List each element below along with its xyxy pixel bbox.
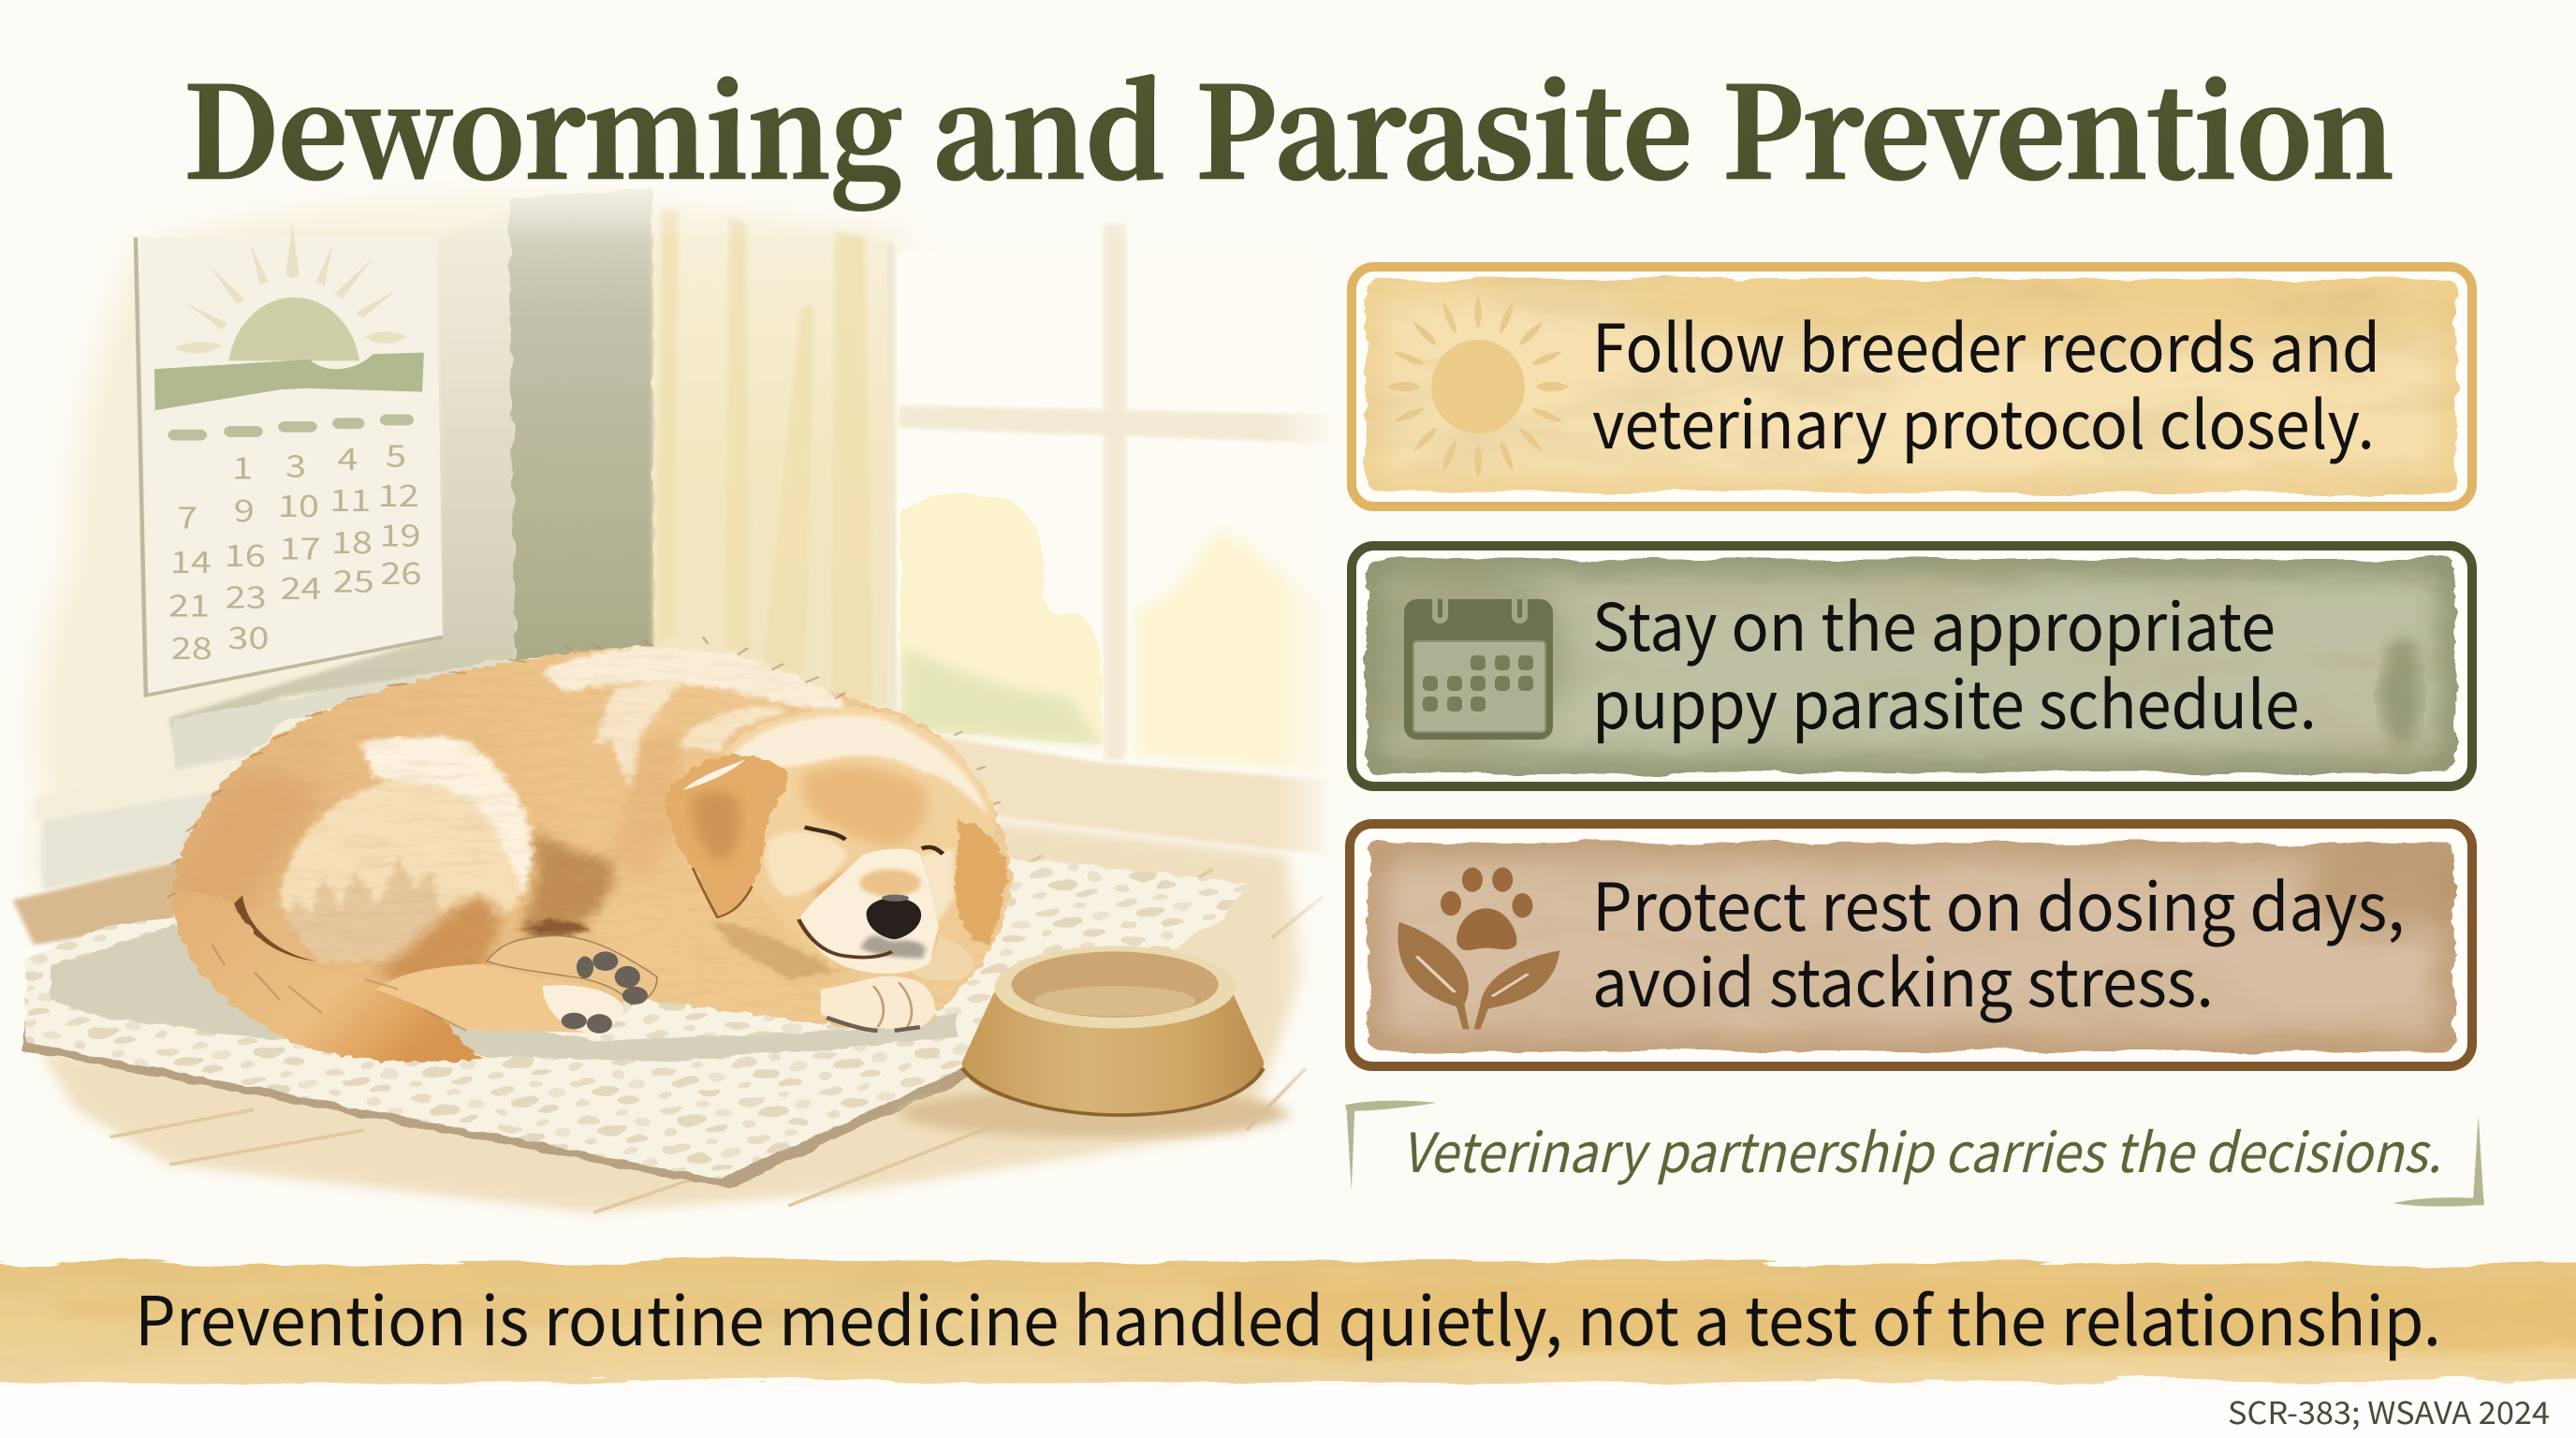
- fur streak texture: [161, 636, 1026, 1034]
- title: Deworming and Parasite Prevention: [183, 35, 2394, 214]
- forehead tan: [802, 766, 927, 845]
- garden wash left pane: [900, 494, 1103, 745]
- rug shadow: [22, 1020, 975, 1189]
- right cheek cream: [920, 848, 954, 924]
- bowl base rim: [962, 1068, 1264, 1115]
- weekday dashes: [168, 415, 414, 441]
- panel text: veterinary protocol closely.: [1592, 374, 2375, 468]
- corner mark: bottom right: [2393, 1115, 2484, 1207]
- muzzle: [798, 849, 939, 974]
- ring shapes: [1435, 591, 1445, 621]
- corner mark: top left: [1345, 1101, 1437, 1191]
- chin shadow: [712, 920, 840, 979]
- calendar on wall: [136, 224, 443, 696]
- panel text: puppy parasite schedule.: [1592, 653, 2317, 748]
- cheek tan stripe: [814, 862, 861, 914]
- window horizontal mullion: [899, 405, 1329, 443]
- caption: Veterinary partnership carries the decisions.: [1401, 1109, 2441, 1188]
- illustration: sleeping golden retriever puppy by a window: [13, 188, 1329, 1212]
- hip white tuft: [360, 737, 532, 897]
- calendar dates: 28: [171, 624, 212, 668]
- calendar dates: 30: [227, 614, 270, 658]
- calendar rings: [1435, 591, 1525, 621]
- bowl floor: [1034, 986, 1195, 1016]
- paw pad: [1456, 908, 1516, 950]
- ray shapes: [174, 224, 407, 353]
- calendar dates: 25: [333, 558, 374, 601]
- puppy tail: [172, 887, 483, 1062]
- panel: protect rest: [1350, 824, 2472, 1066]
- panel wash: [1367, 271, 2509, 492]
- icon: calendar: [1404, 591, 1553, 740]
- puppy head: [721, 709, 995, 974]
- left cheek cream: [766, 831, 848, 897]
- bowl shadow: [899, 1089, 1289, 1137]
- calendar dates: 14: [170, 539, 212, 582]
- hind paw pads: [562, 951, 648, 1034]
- calendar dates: 5: [386, 433, 406, 476]
- rug weave flecks: [25, 858, 1248, 1180]
- bowl inside: [1012, 951, 1219, 1018]
- calendar dates: 4: [337, 436, 358, 479]
- calendar dates: 7: [177, 494, 198, 537]
- muzzle tan spot: [859, 869, 921, 897]
- rump shade: [176, 773, 316, 910]
- calendar dates: 26: [380, 550, 422, 594]
- food bowl: [899, 946, 1289, 1137]
- panel text: Protect rest on dosing days,: [1592, 856, 2405, 950]
- calendar dates: 19: [379, 512, 421, 555]
- lower wall grey wash: [174, 656, 526, 773]
- neck tan shade: [610, 732, 679, 883]
- wall wash: [34, 189, 1001, 889]
- sun rays: [1386, 295, 1570, 478]
- right ear: [956, 821, 1007, 946]
- calendar dates: 16: [225, 532, 266, 576]
- panel: parasite schedule: [1348, 546, 2472, 786]
- crease by tail: [234, 895, 316, 961]
- left ear: [665, 755, 789, 917]
- calendar left edge: [136, 237, 443, 696]
- calendar page: [139, 237, 443, 696]
- head cream top: [729, 715, 988, 814]
- calendar dates: 17: [280, 525, 321, 568]
- floor strip: [13, 858, 191, 945]
- front paw toe lines: [873, 982, 912, 1027]
- calendar dates: 9: [234, 488, 255, 531]
- panel text: [1592, 856, 2405, 1026]
- back cream line: [543, 642, 848, 712]
- calendar dates: 3: [285, 443, 306, 486]
- body markings clipped to silhouette: [161, 636, 1026, 1034]
- window vertical mullion: [1104, 224, 1126, 759]
- green foliage wash: [900, 650, 1103, 745]
- closed eyes: [805, 828, 943, 854]
- puppy body: [161, 636, 1026, 1034]
- nose: [867, 898, 921, 939]
- panel wash: [1348, 559, 2456, 773]
- leaf veins: [1416, 956, 1528, 996]
- paw toes: [1441, 868, 1532, 917]
- cells: [1471, 655, 1486, 670]
- panel frame: [1350, 824, 2472, 1066]
- left leaf: [1398, 922, 1470, 1029]
- second front paw: [912, 936, 973, 981]
- panel wash: [1368, 843, 2471, 1051]
- calendar dates: 12: [378, 472, 419, 516]
- calendar body: [1404, 599, 1553, 740]
- thigh red-brown patch: [373, 897, 501, 1013]
- body silhouette: [173, 647, 1011, 1027]
- sun disc: [1431, 340, 1525, 433]
- calendar dates: 11: [329, 477, 371, 521]
- curtain fold shadows: [657, 210, 873, 704]
- panel text: avoid stacking stress.: [1592, 932, 2214, 1026]
- scene top fade: [0, 159, 1348, 243]
- wall shading near calendar: [169, 210, 518, 759]
- scene right fade: [1273, 178, 1339, 1114]
- calendar dates: [168, 433, 422, 668]
- lower paper strip: [0, 1386, 2576, 1438]
- panel text: [1592, 576, 2317, 748]
- calendar sheet: [1413, 641, 1545, 732]
- nose highlight: [882, 895, 909, 902]
- icon: sun: [1386, 295, 1570, 478]
- light curtains: [652, 206, 895, 712]
- left ear lower line: [693, 868, 752, 917]
- puppy: [161, 636, 1026, 1062]
- calendar dates: 24: [280, 565, 322, 609]
- neck and chest fur: [585, 895, 848, 1017]
- white hind paw: [543, 985, 624, 1033]
- rug base: [25, 858, 1248, 1180]
- dark curtain panel: [508, 188, 654, 660]
- calendar dates: 18: [331, 519, 373, 563]
- calendar dates: 10: [278, 482, 319, 526]
- calendar sun: [229, 298, 359, 360]
- icon: paw and leaves: [1398, 868, 1559, 1029]
- pad shapes: [593, 951, 618, 971]
- rug: [22, 858, 1248, 1189]
- window: [886, 224, 1329, 856]
- baseboard: [34, 756, 246, 821]
- calendar dates: 23: [226, 574, 267, 617]
- muzzle grey shadow: [860, 935, 926, 959]
- front paw dark claw edge: [827, 1018, 920, 1031]
- curtain base: [652, 206, 895, 712]
- chest deep crease: [521, 920, 593, 938]
- bottom takeaway band: [0, 1262, 2576, 1382]
- hip pale patch: [280, 779, 524, 961]
- panel text: [1592, 297, 2380, 468]
- left ear dark patch: [691, 790, 741, 862]
- grey wall base: [42, 790, 229, 889]
- bowl rim: [995, 946, 1236, 1029]
- shoulder cream stripe: [593, 677, 687, 793]
- hip flame shading: [284, 856, 441, 961]
- panel text: Stay on the appropriate: [1592, 576, 2276, 670]
- right leaf: [1474, 950, 1559, 1029]
- left ear cream highlight: [682, 759, 746, 790]
- floor boards: [110, 856, 1323, 1212]
- bowl body: [962, 990, 1264, 1115]
- upper hind foot: [487, 935, 657, 1005]
- calendar day cells: [1423, 655, 1533, 712]
- chest shadow: [519, 828, 613, 938]
- panel frame: [1352, 267, 2472, 506]
- hind leg: [375, 964, 624, 1033]
- window panes: [897, 251, 1329, 759]
- calendar sun rays: [174, 224, 407, 353]
- mouth: [798, 919, 892, 958]
- panel: breeder records: [1352, 267, 2509, 506]
- garden wash right pane: [1136, 529, 1329, 773]
- window left frame: [886, 244, 894, 718]
- window sill: [932, 735, 1329, 856]
- shadow under puppy: [51, 924, 959, 1062]
- band text: Prevention is routine medicine handled quietly, not a test of the relationship.: [135, 1267, 2441, 1365]
- source note: SCR-383; WSAVA 2024: [2228, 1388, 2550, 1433]
- calendar dates: 21: [168, 582, 210, 625]
- floor wash: [42, 821, 1306, 1212]
- dash shapes: [168, 430, 207, 441]
- baseboard and floor edge: [13, 756, 246, 945]
- calendar header band: [154, 353, 424, 410]
- panel text: Follow breeder records and: [1592, 297, 2380, 391]
- panel frame: [1352, 546, 2472, 786]
- fur strokes: [167, 637, 1001, 1031]
- band wash: [0, 1262, 2576, 1382]
- front paw: [821, 976, 936, 1030]
- neck cream ruff: [679, 707, 788, 753]
- calendar dates: 1: [232, 445, 253, 488]
- scene far right cover: [1339, 178, 1348, 1114]
